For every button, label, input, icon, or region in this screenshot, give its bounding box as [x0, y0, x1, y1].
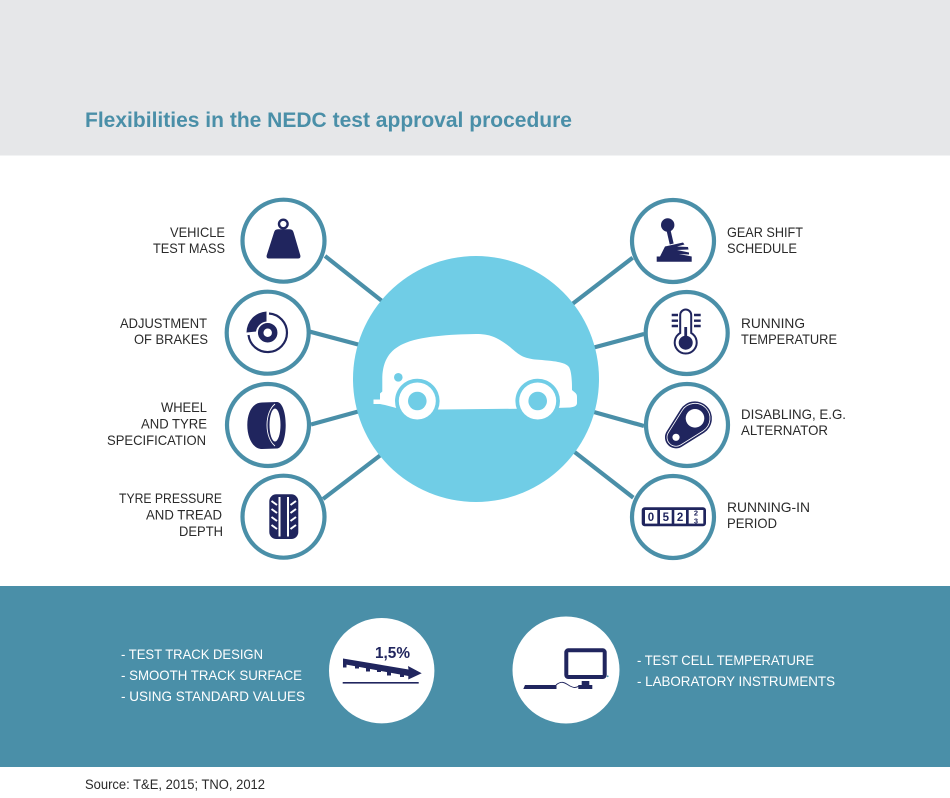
label: AND TREAD [146, 506, 222, 522]
label [741, 315, 837, 347]
label: ADJUSTMENT [120, 315, 207, 331]
list: track: - USING STANDARD VALUES [121, 688, 305, 704]
icon: sloped track: 1,5% [375, 645, 410, 662]
label [107, 399, 207, 448]
icon: computer [512, 616, 620, 724]
icon: odometer: 2 [694, 508, 698, 518]
item: running-in period [632, 476, 810, 558]
label: GEAR SHIFT [727, 224, 803, 240]
item: disabling alternator [646, 384, 846, 466]
icon: brake disc [246, 312, 287, 352]
label: SPECIFICATION [107, 432, 206, 448]
label: AND TYRE [141, 416, 207, 432]
label [741, 406, 846, 438]
list: track [121, 646, 305, 704]
icon: odometer: 3 [694, 516, 698, 525]
label: WHEEL [161, 399, 207, 415]
icon: odometer [642, 507, 706, 526]
label: SCHEDULE [727, 240, 797, 256]
list: track: - TEST TRACK DESIGN [121, 646, 263, 662]
label [727, 224, 803, 256]
label: OF BRAKES [134, 331, 208, 347]
label: RUNNING [741, 315, 805, 331]
icon: gear stick [657, 218, 692, 262]
icon: tread [269, 494, 298, 539]
label: DEPTH [179, 523, 223, 539]
icon: thermometer [672, 310, 701, 354]
item: gear shift schedule [632, 200, 803, 282]
header band [0, 0, 950, 156]
label: TEMPERATURE [741, 331, 837, 347]
title: Flexibilities in the NEDC test approval procedure [85, 109, 572, 132]
label [727, 499, 810, 531]
item: tyre pressure and tread depth [119, 476, 324, 558]
label: PERIOD [727, 515, 777, 531]
label: RUNNING-IN [727, 499, 810, 515]
connector lines [310, 256, 644, 499]
label: ALTERNATOR [741, 422, 828, 438]
icon: tyre [247, 402, 286, 449]
central circle with car [353, 256, 599, 502]
label [119, 490, 223, 539]
icon: weight [267, 220, 300, 258]
label: TYRE PRESSURE [119, 490, 222, 506]
list: laboratory: - LABORATORY INSTRUMENTS [637, 673, 835, 689]
bottom panel [0, 586, 950, 767]
label: DISABLING, E.G. [741, 406, 846, 422]
label: TEST MASS [153, 240, 225, 256]
item: adjustment of brakes [120, 292, 309, 374]
label: VEHICLE [170, 224, 225, 240]
icon: odometer: 2 [677, 512, 683, 524]
icon: belt and pulleys [665, 401, 712, 448]
list: laboratory: - TEST CELL TEMPERATURE [637, 652, 814, 668]
label [153, 224, 225, 256]
icon: odometer: 5 [663, 512, 670, 524]
icon: odometer: 0 [648, 512, 654, 524]
item: vehicle test mass [153, 200, 324, 282]
item: running temperature [646, 292, 837, 374]
label [120, 315, 208, 347]
icon: sloped track [329, 618, 434, 723]
icon: car [374, 334, 577, 423]
item: wheel and tyre specification [107, 384, 309, 466]
list: laboratory [637, 652, 835, 689]
list: track: - SMOOTH TRACK SURFACE [121, 667, 302, 683]
source note: Source: T&E, 2015; TNO, 2012 [85, 776, 265, 792]
